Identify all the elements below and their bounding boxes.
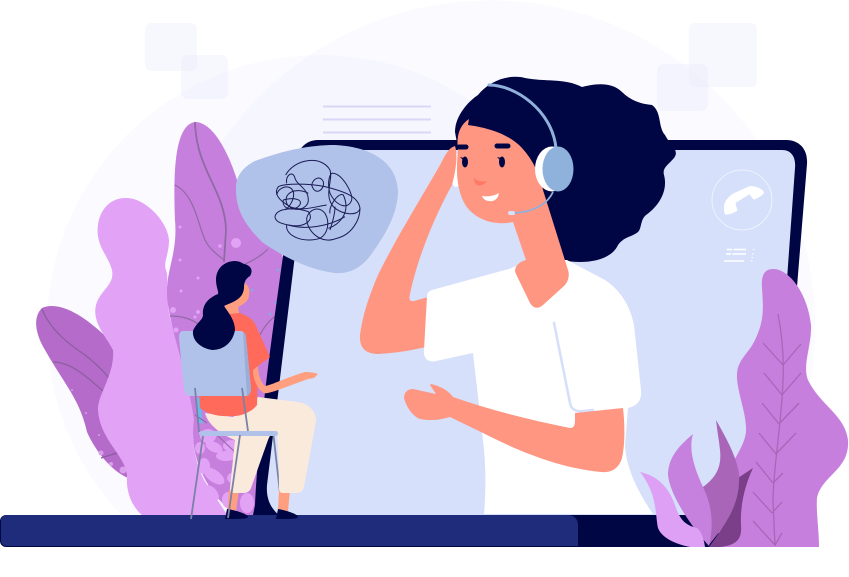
eyes xyxy=(460,156,505,168)
chair back xyxy=(179,331,251,396)
back leg and shoe xyxy=(278,490,290,511)
nose xyxy=(474,177,487,185)
arm xyxy=(253,366,318,393)
speech bubble xyxy=(236,145,398,273)
agent shirt xyxy=(424,260,653,514)
eyebrows xyxy=(459,146,508,147)
seated woman xyxy=(179,261,318,519)
plant: dark left leaf xyxy=(36,306,140,478)
agent raised arm xyxy=(360,146,456,354)
plant: back purple leaf xyxy=(167,122,283,515)
tangled scribble xyxy=(275,160,360,240)
trousers xyxy=(205,397,316,493)
leaf veins xyxy=(753,314,801,546)
text lines above tablet xyxy=(323,106,431,132)
sleeve seam xyxy=(554,323,593,411)
hair xyxy=(193,261,252,350)
keyboard bar xyxy=(1,515,578,546)
smile xyxy=(482,193,499,201)
chair seat xyxy=(199,431,278,436)
tablet frame xyxy=(252,140,807,520)
blue reflection xyxy=(196,398,203,424)
shirt xyxy=(199,312,270,416)
chair rear legs behind xyxy=(273,431,280,493)
agent left ear cup xyxy=(450,153,462,187)
neck xyxy=(225,283,249,314)
phone call icon xyxy=(712,170,772,230)
front ankle and shoe xyxy=(227,490,239,511)
agent hair xyxy=(455,77,676,262)
tablet screen xyxy=(267,150,795,516)
chair legs xyxy=(191,388,248,519)
laptop base xyxy=(0,515,722,547)
agent face and neck xyxy=(457,119,569,308)
right plant xyxy=(718,269,848,547)
small front plant xyxy=(640,420,753,547)
call details xyxy=(724,250,754,261)
headset xyxy=(489,85,574,215)
plant: light pink leaf xyxy=(95,198,228,516)
lower arm xyxy=(404,384,624,472)
plant: pattern in lower leaf xyxy=(195,415,254,513)
floating squares xyxy=(145,23,757,111)
